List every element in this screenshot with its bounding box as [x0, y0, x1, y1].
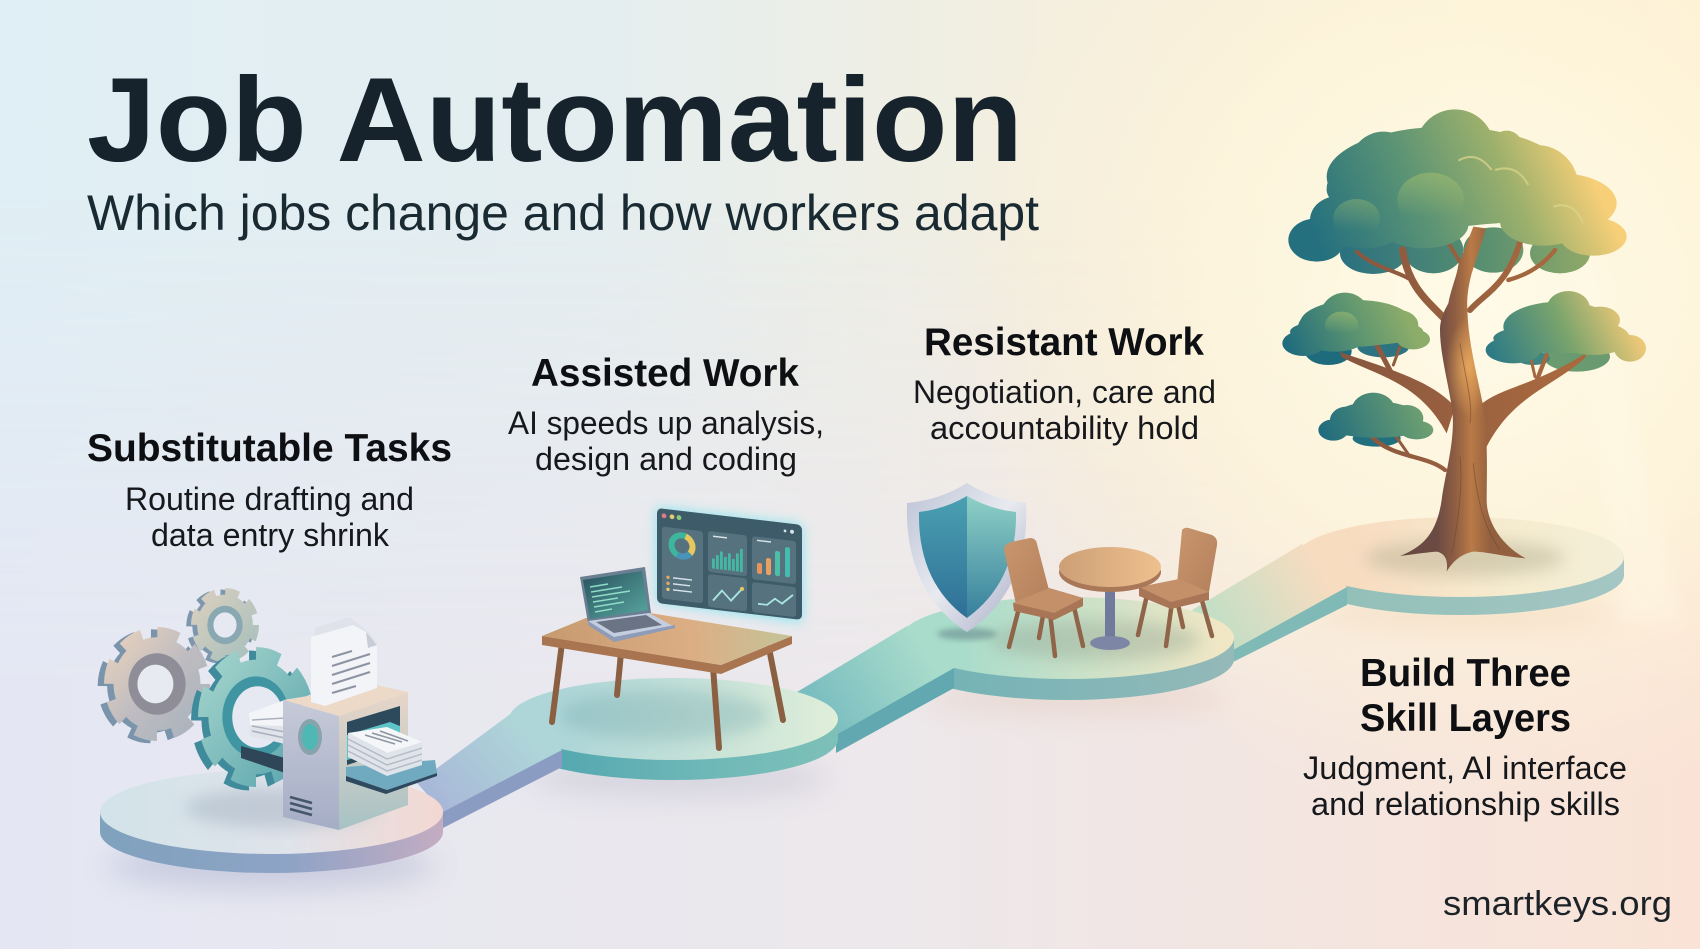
- conveyor left: [241, 746, 285, 773]
- right canopy: [1486, 291, 1646, 363]
- rear of small canopies: [1305, 336, 1610, 447]
- icon: tree: [1282, 109, 1646, 572]
- icon: gears and document machine: [104, 592, 437, 830]
- donut chart: [667, 529, 697, 562]
- text: resistant work description: accountability hold: [930, 410, 1199, 446]
- desk top: [542, 607, 792, 674]
- line charts: [713, 584, 793, 610]
- heading: build three skill layers: Skill Layers: [1360, 697, 1571, 740]
- text: assisted work description: AI speeds up analysis,: [508, 405, 824, 441]
- platform 3: [901, 597, 1234, 700]
- thick limbs: [1339, 352, 1587, 447]
- text: assisted work description: design and coding: [535, 441, 797, 477]
- text: substitutable tasks description: data entry shrink: [151, 517, 390, 553]
- left canopy: [1282, 293, 1430, 356]
- dashboard glow: [657, 508, 802, 622]
- dashboard screen: [657, 508, 802, 620]
- icon: small gear: [190, 592, 255, 659]
- teal bar chart: [712, 535, 743, 572]
- text: skill layers description: Judgment, AI interface: [1303, 750, 1627, 786]
- subtitle: Which jobs change and how workers adapt: [87, 185, 1039, 241]
- heading: assisted work: Assisted Work: [531, 352, 799, 395]
- heading: substitutable tasks: Substitutable Tasks: [87, 427, 452, 470]
- ramp 2 to 3: [797, 626, 954, 753]
- platform 2: [509, 678, 838, 780]
- icon: large grey gear: [104, 634, 204, 736]
- title: Job Automation: [87, 53, 1023, 187]
- left canopy highlight: [1325, 312, 1358, 338]
- trunk light: [1448, 324, 1482, 409]
- desk legs: [552, 643, 783, 748]
- lower canopy: [1318, 393, 1433, 441]
- canopy highlights: [1333, 157, 1583, 238]
- text: skill layers description: and relationship skills: [1311, 786, 1620, 822]
- round table: [1059, 547, 1161, 650]
- document with lines: [311, 625, 377, 706]
- icon: table and chairs: [1004, 528, 1217, 656]
- left paper stack: [249, 700, 285, 744]
- branches: [1357, 237, 1555, 470]
- trunk: [1400, 227, 1526, 572]
- ramp 1 to 2: [417, 712, 562, 828]
- machine body: [283, 685, 408, 830]
- trunk grooves: [1452, 343, 1500, 553]
- bullet list: [666, 575, 692, 594]
- platform 1: [100, 770, 443, 873]
- icon: teal gear: [198, 655, 307, 782]
- text: resistant work description: Negotiation, care and: [913, 374, 1216, 410]
- laptop: [580, 567, 675, 642]
- main canopy: [1288, 109, 1627, 262]
- right chair: [1138, 528, 1217, 646]
- output paper stack: [348, 727, 422, 776]
- source url: smartkeys.org: [1443, 885, 1672, 923]
- colour bar chart: [757, 540, 790, 578]
- heading: build three skill layers: Build Three: [1360, 652, 1571, 695]
- platform shadows: [106, 599, 1615, 890]
- left chair: [1004, 538, 1083, 656]
- rear canopy: [1340, 227, 1590, 274]
- platform 4: [1296, 517, 1624, 615]
- text: substitutable tasks description: Routine drafting and: [125, 481, 414, 517]
- icon: shield: [907, 483, 1026, 640]
- output conveyor: [346, 760, 437, 794]
- icon: desk with laptop and dashboard: [542, 508, 802, 748]
- ramp 3 to 4: [1192, 544, 1347, 662]
- back sheets of document: [314, 617, 375, 704]
- heading: resistant work: Resistant Work: [924, 321, 1204, 364]
- stepped path: [100, 517, 1624, 890]
